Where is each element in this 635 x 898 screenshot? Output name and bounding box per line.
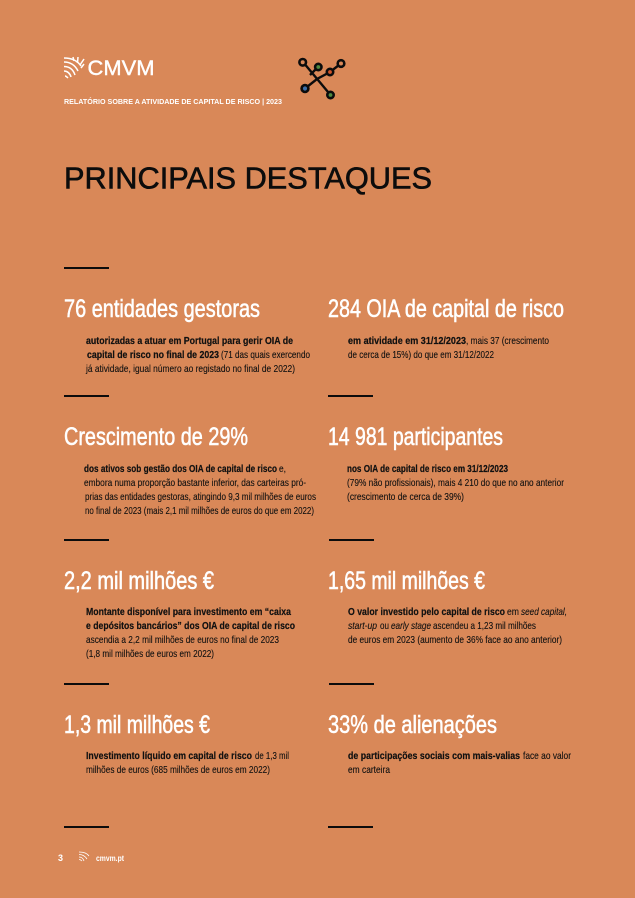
body text [85,335,310,375]
heading: 2,2 mil milhões € [64,567,214,595]
footer logo mark [79,852,89,861]
panel: crescimento [64,423,316,517]
body text: em [507,606,519,618]
body text: de euros em 2023 (aumento de 36% face ao ano anterior) [348,634,562,646]
heading: 14 981 participantes [328,423,503,451]
body text [348,606,567,646]
body text: Investimento líquido em capital de risco [86,750,252,762]
body text [84,463,316,517]
body text: (crescimento de cerca de 39%) [347,491,464,503]
logo wordmark: CMVM [88,57,154,80]
body text: nos OIA de capital de risco em 31/12/2023 [347,463,508,475]
body text: , mais 37 (crescimento [466,335,549,347]
body text: (79% não profissionais), mais 4 210 do que no ano anterior [347,477,564,489]
body text: no final de 2023 (mais 2,1 mil milhões de euros do que em 2022) [85,505,314,517]
body text: capital de risco no final de 2023 [87,349,219,361]
body text: start-up [348,620,377,632]
panel: valor investido [328,567,567,646]
body text: e, [279,463,286,475]
panel: alienações [328,711,571,776]
CMVM logo [64,57,154,80]
body text [86,750,289,776]
heading: 76 entidades gestoras [64,295,260,323]
body text: ascendeu a 1,23 mil milhões [433,620,536,632]
body text: (71 das quais exercendo [221,349,310,361]
panel: investimento líquido [64,711,289,776]
footer [58,852,124,863]
report label: RELATÓRIO SOBRE A ATIVIDADE DE CAPITAL DE RISCO | 2023 [64,97,282,106]
body text: dos ativos sob gestão dos OIA de capital de risco [84,463,277,475]
body text [348,750,571,776]
body text: de participações sociais com mais-valias [348,750,520,762]
body text [347,463,564,503]
panel: OIA de capital de risco [328,295,564,361]
body text: já atividade, igual número ao registado no final de 2022) [85,363,295,375]
body text: early stage [391,620,431,632]
page number: 3 [58,853,63,863]
body text: e depósitos bancários” dos OIA de capital de risco [86,620,295,632]
body text: embora numa proporção bastante inferior, das carteiras pró- [84,477,306,489]
body text: autorizadas a atuar em Portugal para gerir OIA de [86,335,293,347]
body text: milhões de euros (685 milhões de euros em 2022) [86,764,270,776]
panel: entidades gestoras [64,295,310,375]
title: PRINCIPAIS DESTAQUES [64,162,432,196]
body text: em carteira [348,764,390,776]
heading: 1,65 mil milhões € [328,567,485,595]
panel: participantes [328,423,564,503]
body text: em atividade em 31/12/2023 [348,335,466,347]
logo mark [64,57,84,78]
heading: 33% de alienações [328,711,497,739]
body text: de 1,3 mil [255,750,289,762]
website: cmvm.pt [96,853,124,863]
body text: O valor investido pelo capital de risco [348,606,505,618]
panel: montante disponível [64,567,295,660]
heading: Crescimento de 29% [64,423,248,451]
body text: prias das entidades gestoras, atingindo 9,3 mil milhões de euros [85,491,316,503]
heading: 284 OIA de capital de risco [328,295,564,323]
body text: face ao valor [523,750,571,762]
body text: Montante disponível para investimento em “caixa [86,606,291,618]
body text [86,606,295,660]
heading: 1,3 mil milhões € [64,711,210,739]
body text: (1,8 mil milhões de euros em 2022) [86,648,214,660]
body text [348,335,549,361]
header [64,57,344,106]
body text: de cerca de 15%) do que em 31/12/2022 [348,349,494,361]
icon: network nodes [299,59,344,98]
body text: ou [380,620,389,632]
body text: ascendia a 2,2 mil milhões de euros no final de 2023 [86,634,279,646]
body text: seed capital, [521,606,567,618]
